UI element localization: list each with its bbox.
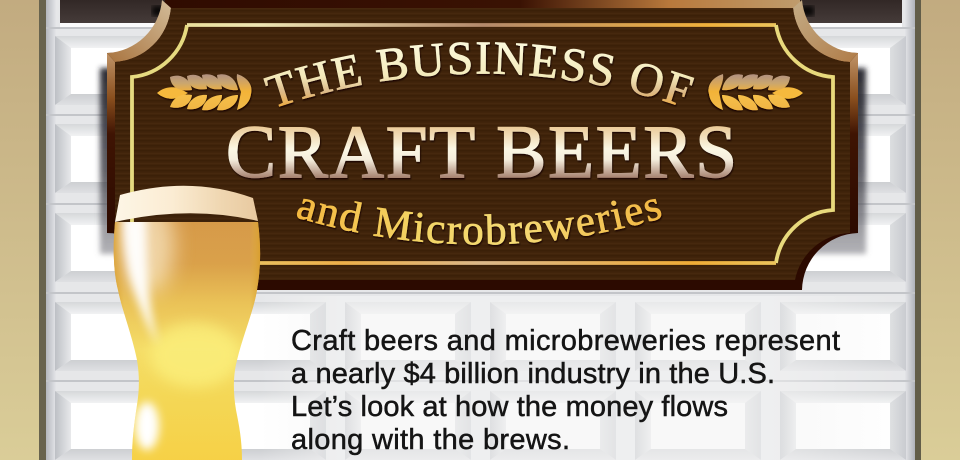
intro text: a nearly $4 billion industry in the U.S. [291, 358, 775, 390]
title: Craft Beers: CRAFT BEERS [226, 111, 737, 194]
foam head [115, 186, 258, 222]
intro text: Craft beers and microbreweries represent [291, 325, 840, 357]
beer glass [114, 186, 260, 460]
icon: left wheat sprig [157, 74, 252, 110]
gold inner border [132, 25, 833, 263]
wooden sign [107, 0, 858, 290]
sign shadow [100, 6, 866, 254]
intro text: along with the brews. [291, 424, 570, 456]
intro text [291, 325, 840, 456]
title: and Microbreweries: and Microbreweries [296, 198, 663, 247]
icon: right wheat sprig [708, 74, 803, 110]
title: The Business Of: THE BUSINESS OF [263, 42, 696, 108]
intro text: Let’s look at how the money flows [291, 391, 728, 423]
